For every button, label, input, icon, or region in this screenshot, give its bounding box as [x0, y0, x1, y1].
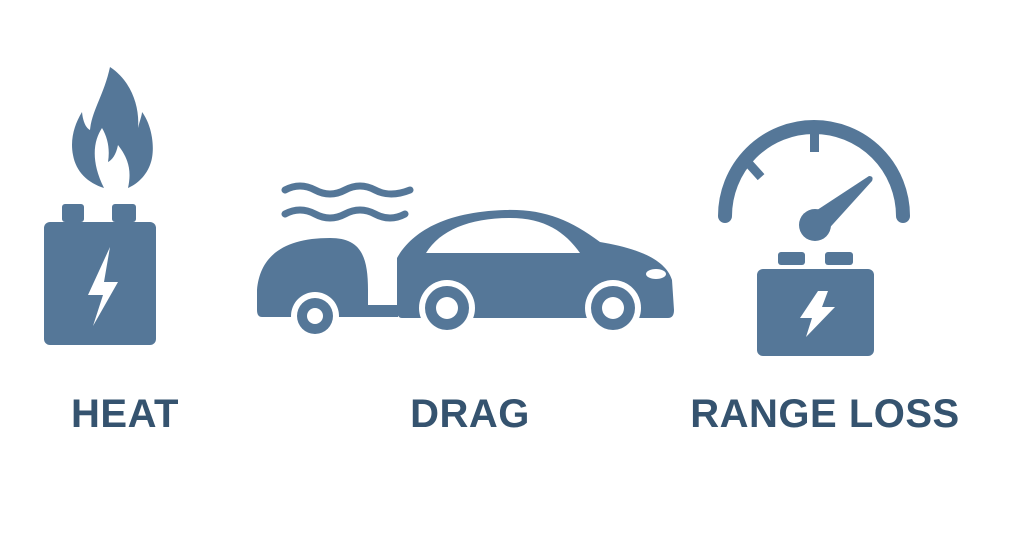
icon: battery with flame	[44, 67, 156, 345]
flame	[72, 67, 153, 188]
label: drag: DRAG	[410, 392, 530, 436]
label: heat: HEAT	[71, 392, 179, 436]
icon: car with trailer and wind	[257, 186, 674, 340]
label: range loss: RANGE LOSS	[690, 392, 960, 436]
icon: speedometer with battery	[725, 127, 903, 356]
